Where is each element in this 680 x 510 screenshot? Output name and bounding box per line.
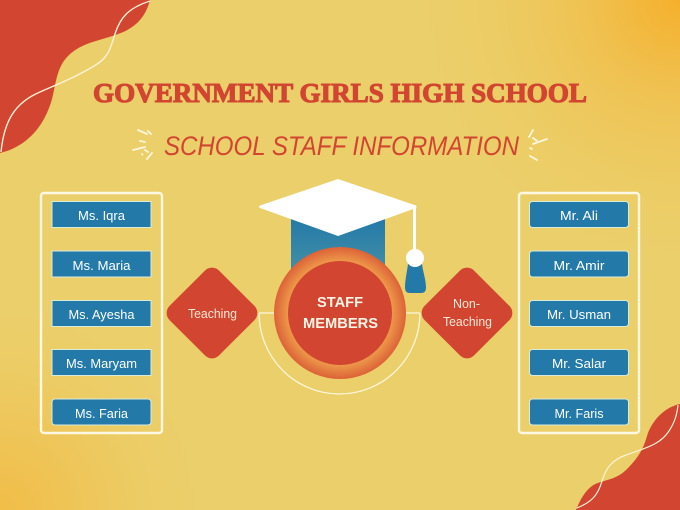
name: Ms. Maria [52,251,151,277]
diamond: non-teaching: Teaching [443,314,492,329]
diamond: teaching [163,264,261,362]
diamond: non-teaching: Non- [453,296,480,311]
name: Ms. Faria: Ms. Faria [75,406,129,421]
name: Ms. Ayesha: Ms. Ayesha [68,307,135,322]
name: Mr. Ali: Mr. Ali [560,208,598,223]
central circle: staff members [274,247,406,379]
name: Mr. Salar: Mr. Salar [552,356,607,371]
name: Mr. Usman [530,300,628,326]
name: Mr. Faris: Mr. Faris [554,406,604,421]
decorative blob: top left [0,0,150,153]
name: Ms. Iqra [52,202,151,228]
name: Ms. Maria: Ms. Maria [72,258,131,273]
diamond: non-teaching [418,264,516,362]
name: Ms. Iqra: Ms. Iqra [78,208,126,223]
name: Ms. Maryam [52,350,151,376]
central circle: staff members: MEMBERS [303,315,378,332]
subtitle: SCHOOL STAFF INFORMATION [164,131,520,161]
sunburst: right [529,130,547,160]
name: Ms. Faria [52,399,151,425]
connector arc [259,313,420,394]
decorative blob: bottom right [576,404,680,510]
panel: non-teaching staff list [519,193,639,433]
name: Mr. Amir: Mr. Amir [554,258,605,273]
name: Mr. Amir [530,251,628,277]
name: Mr. Faris [530,399,628,425]
name: Mr. Salar [530,350,628,376]
diamond: teaching: Teaching [188,306,237,321]
sunburst: left [133,130,152,159]
icon: graduation cap [259,179,426,293]
panel: teaching staff list [41,193,162,433]
title: GOVERNMENT GIRLS HIGH SCHOOL [93,78,587,108]
name: Ms. Ayesha [52,300,151,326]
name: Mr. Usman: Mr. Usman [547,307,611,322]
central circle: staff members: STAFF [317,294,363,311]
name: Ms. Maryam: Ms. Maryam [66,356,137,371]
name: Mr. Ali [530,202,628,228]
